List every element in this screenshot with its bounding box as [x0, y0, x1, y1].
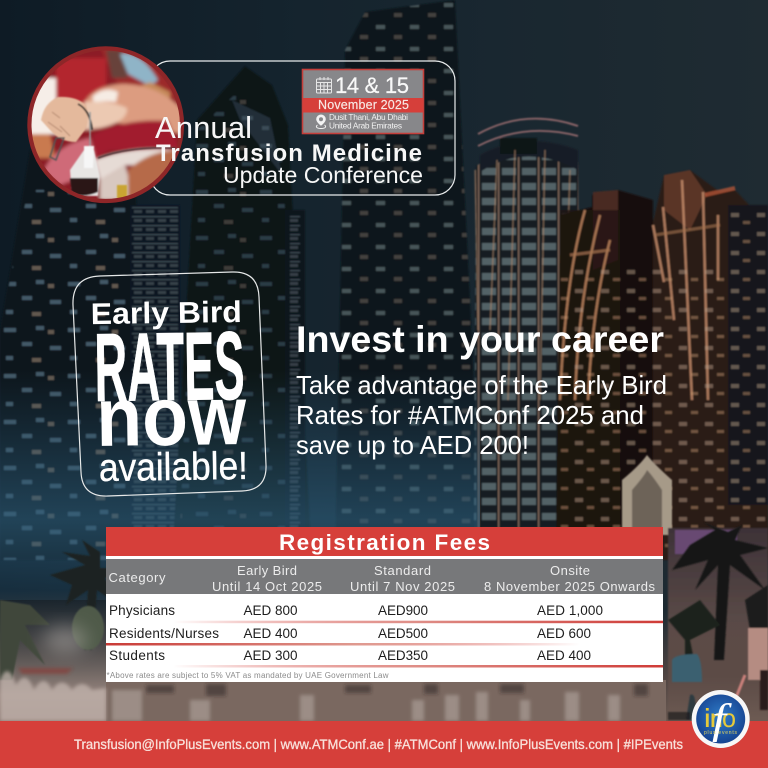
palms and car — [0, 522, 768, 720]
table row: physicians: AED 1,000 — [537, 603, 603, 618]
header conference outline box — [150, 61, 455, 195]
table header row: Until 7 Nov 2025 — [350, 579, 455, 594]
logo: info plus events: in — [704, 703, 722, 733]
VAT footnote: *Above rates are subject to 5% VAT as mandated by UAE Government Law — [106, 671, 389, 680]
table header row: Onsite — [550, 563, 590, 578]
logo: info plus events: plus events — [704, 730, 738, 736]
footer band with contact links: Transfusion@InfoPlusEvents.com | www.ATMConf.ae | #ATMConf | www.InfoPlusEvents.com | #IPEvents — [74, 737, 683, 752]
table row: residents and nurses: Residents/Nurses — [109, 626, 219, 641]
table header row: Standard — [374, 563, 431, 578]
panel: registration fees table — [106, 527, 663, 682]
table row: residents and nurses: AED 600 — [537, 626, 591, 641]
table header row: Early Bird — [237, 563, 297, 578]
table title: Registration Fees — [279, 530, 490, 555]
table row: students: AED 400 — [537, 648, 591, 663]
table header row: 8 November 2025 Onwards — [484, 579, 656, 594]
logo: info plus events: o — [722, 703, 736, 733]
table header row — [106, 559, 663, 594]
table row: physicians: Physicians — [109, 603, 175, 618]
fountain — [0, 668, 648, 721]
early bird rotated outline box — [73, 272, 266, 496]
conference title: Annual — [155, 110, 252, 145]
headline and description — [296, 319, 667, 460]
table row: physicians: AED900 — [378, 603, 428, 618]
date and venue badge: November 2025 — [318, 98, 409, 112]
date and venue badge: Dusit Thani, Abu Dhabi — [329, 112, 408, 122]
early bird rates now available text — [91, 296, 248, 490]
table row: students — [109, 648, 591, 663]
date and venue badge: United Arab Emirates — [329, 120, 402, 130]
icon: calendar — [316, 77, 332, 93]
headline and description: Invest in your career — [296, 319, 664, 360]
logo: info plus events: f — [712, 697, 732, 743]
headline and description: Rates for #ATMConf 2025 and — [296, 400, 644, 430]
table row: students: AED350 — [378, 648, 428, 663]
early bird rates now available text: now — [96, 368, 247, 464]
table header row: Until 14 Oct 2025 — [212, 579, 322, 594]
icon: location pin — [316, 114, 326, 128]
table row: residents and nurses: AED 400 — [244, 626, 298, 641]
table row: residents and nurses: AED500 — [378, 626, 428, 641]
table row: students: Students — [109, 648, 165, 663]
table row: residents and nurses — [109, 626, 591, 641]
photo: blood donation circle — [27, 46, 185, 205]
headline and description: Take advantage of the Early Bird — [296, 370, 667, 400]
conference title: Update Conference — [223, 162, 423, 188]
conference title: Transfusion Medicine — [156, 140, 422, 167]
table row: physicians — [109, 603, 603, 618]
early bird rates now available text: Early Bird — [91, 296, 242, 331]
date and venue badge: 14 & 15 — [335, 73, 409, 98]
footer band with contact links — [0, 721, 768, 768]
headline and description: save up to AED 200! — [296, 430, 529, 460]
early bird rates now available text: available! — [99, 445, 248, 490]
date and venue badge — [302, 70, 424, 134]
table row: physicians: AED 800 — [244, 603, 298, 618]
text: RATES — [94, 311, 245, 422]
table title — [106, 527, 663, 556]
table header row: Category — [108, 570, 166, 585]
logo: info plus events — [692, 690, 750, 748]
table row: students: AED 300 — [244, 648, 298, 663]
conference title — [155, 110, 423, 188]
